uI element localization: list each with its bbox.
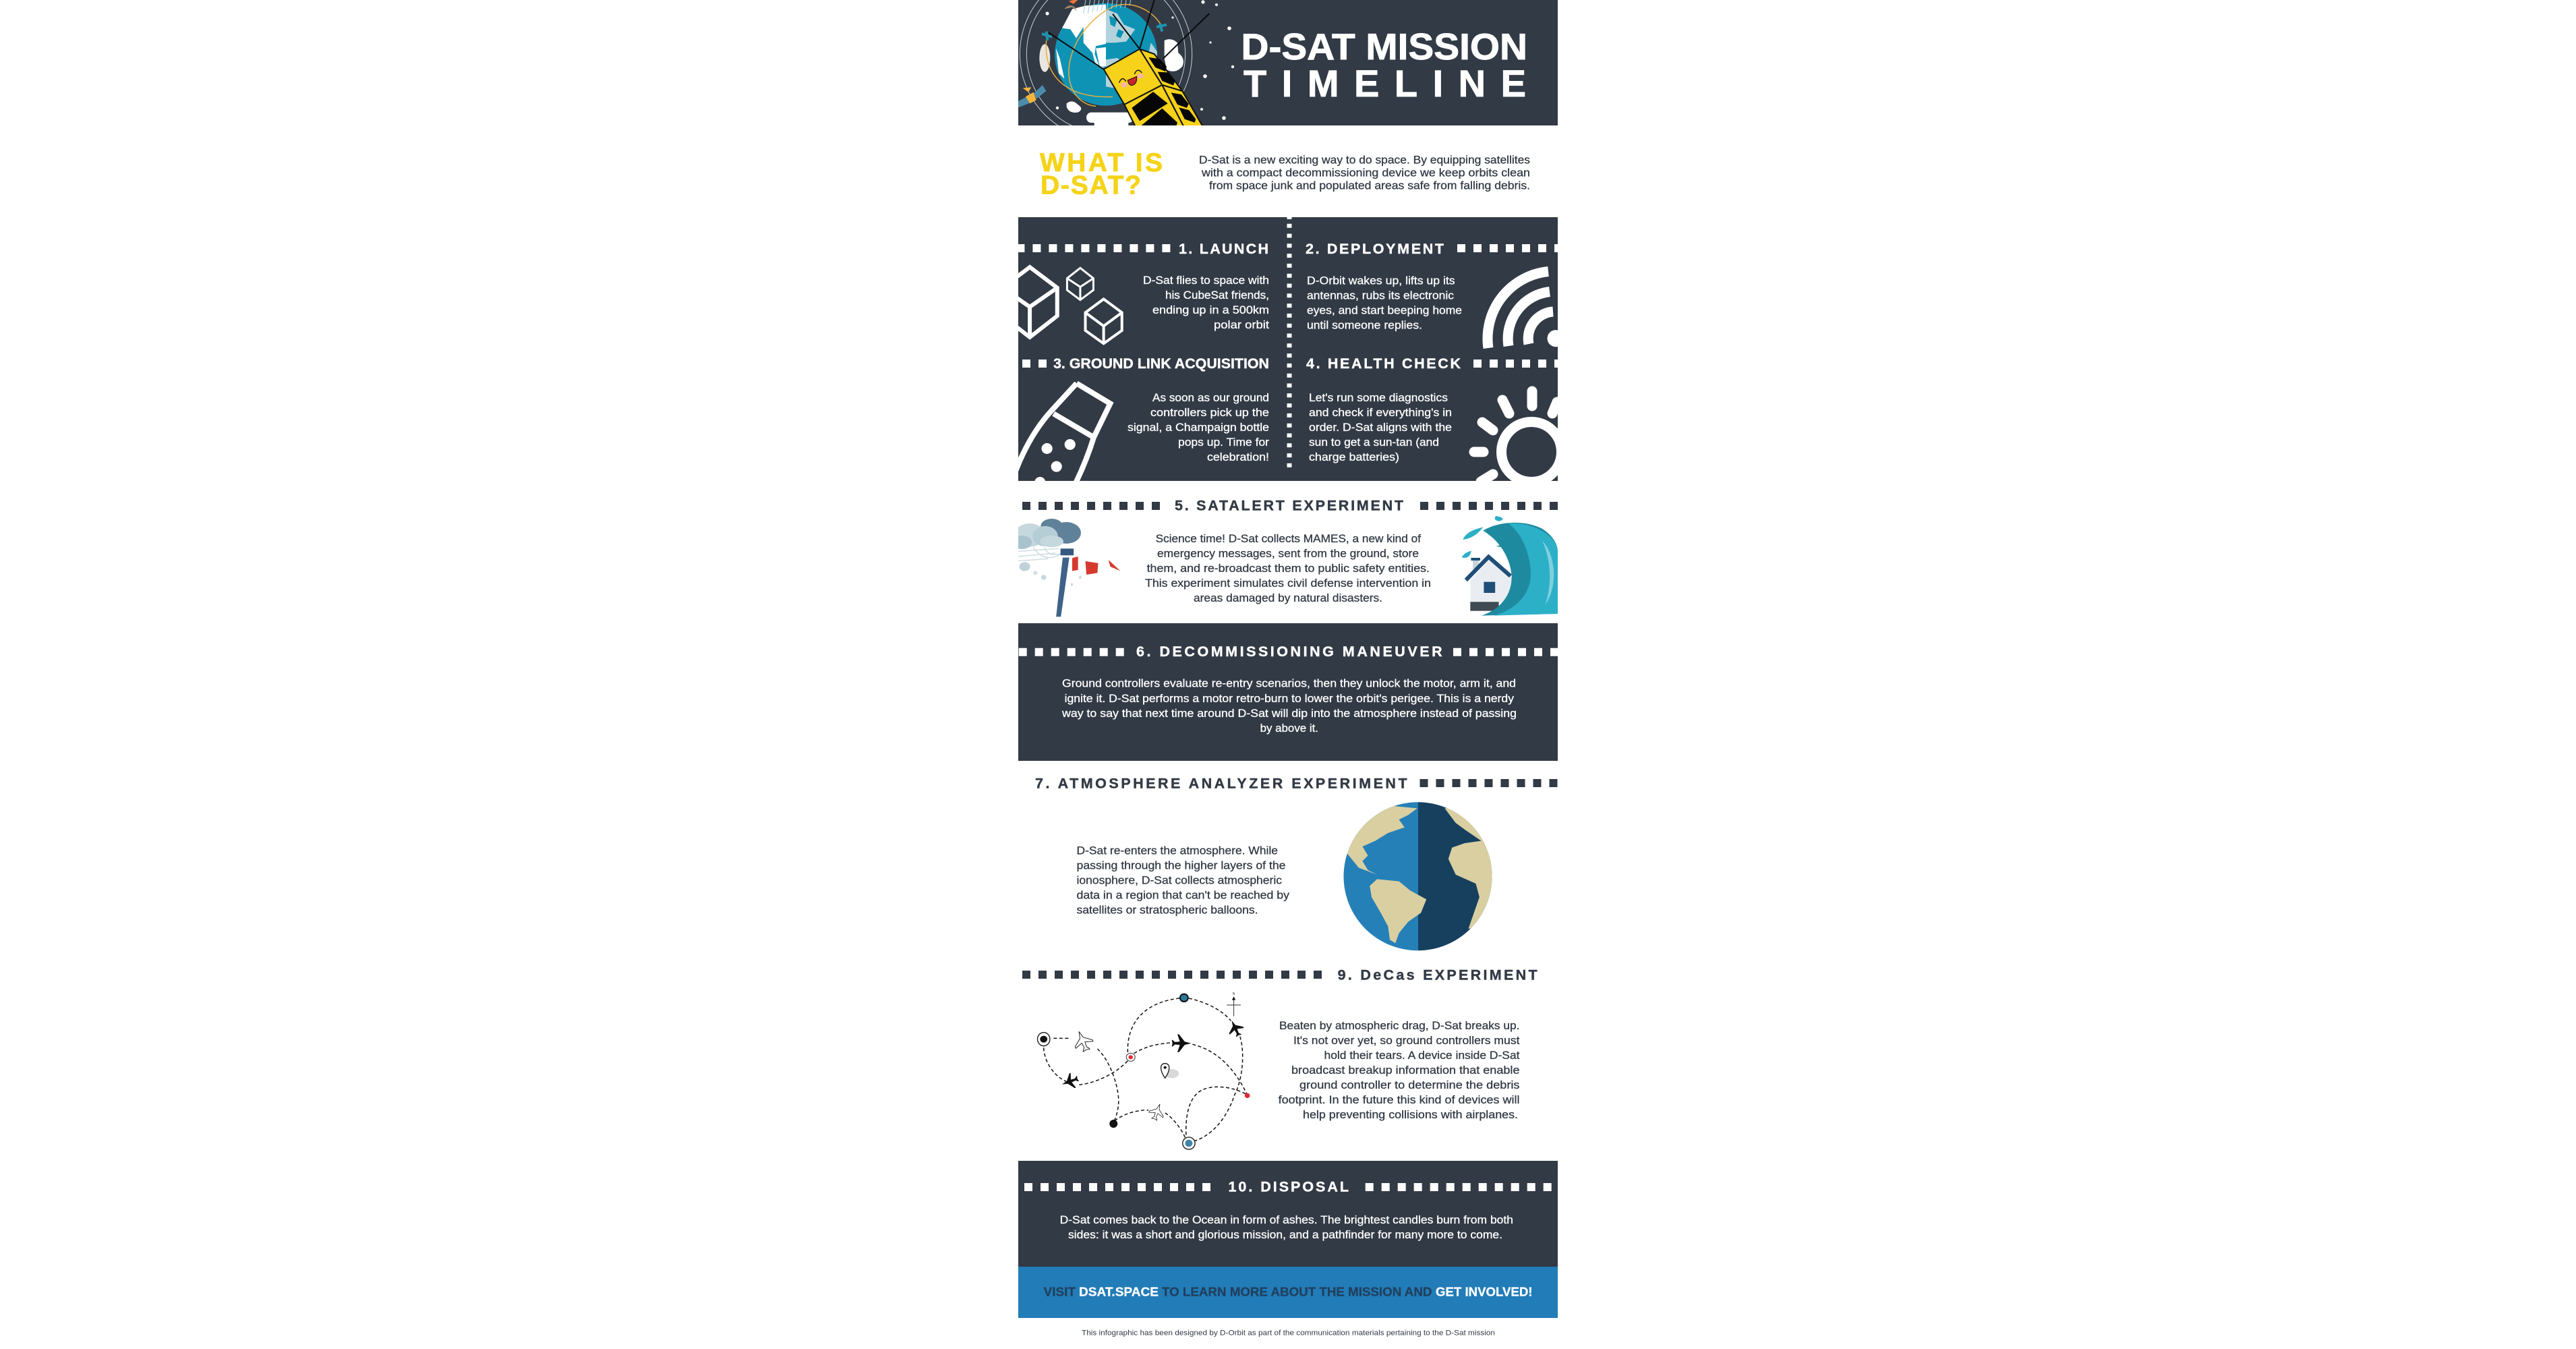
panel: call to action: [1018, 1267, 1558, 1318]
text 10: [1060, 1214, 1513, 1241]
heading 4: 4. HEALTH CHECK: [1306, 355, 1461, 372]
heading 5: 5. SATALERT EXPERIMENT: [1175, 498, 1403, 514]
text 1: his CubeSat friends,: [1165, 289, 1269, 302]
stars: [1045, 0, 1234, 120]
text 7: D-Sat re-enters the atmosphere. While: [1076, 845, 1278, 857]
text: call to action: DSAT.SPACE: [1079, 1285, 1159, 1299]
text 6: ignite it. D-Sat performs a motor retro-burn to lower the orbit's perigee. This is a nerdy: [1065, 693, 1515, 705]
text 5: This experiment simulates civil defense intervention in: [1145, 577, 1431, 590]
panel: atmosphere analyzer experiment: [1035, 775, 1558, 954]
text 1: ending up in a 500km: [1152, 304, 1269, 316]
heading 7: 7. ATMOSPHERE ANALYZER EXPERIMENT: [1035, 775, 1407, 791]
text 10: sides: it was a short and glorious mission, and a pathfinder for many more to come.: [1068, 1229, 1502, 1241]
heading 6: 6. DECOMMISSIONING MANEUVER: [1136, 643, 1442, 660]
text 10: D-Sat comes back to the Ocean in form of ashes. The brightest candles burn from both: [1060, 1214, 1513, 1226]
text 9: broadcast breakup information that enable: [1291, 1064, 1520, 1077]
text 9: hold their tears. A device inside D-Sat: [1324, 1050, 1520, 1062]
text 7: ionosphere, D-Sat collects atmospheric: [1076, 875, 1282, 887]
text 4: and check if everything's in: [1309, 407, 1452, 419]
text 5: Science time! D-Sat collects MAMES, a new kind of: [1156, 533, 1421, 545]
heading 10: 10. DISPOSAL: [1229, 1179, 1349, 1195]
text 9: ground controller to determine the debris: [1299, 1079, 1520, 1091]
text 6: Ground controllers evaluate re-entry scenarios, then they unlock the motor, arm it, and: [1062, 678, 1516, 690]
panel: satalert experiment: [1012, 498, 1558, 616]
text 5: emergency messages, sent from the ground, store: [1157, 548, 1419, 560]
text 6: way to say that next time around D-Sat will dip into the atmosphere instead of passing: [1061, 708, 1517, 720]
illustration: satellite over Earth: [1018, 0, 1234, 125]
icon: sun: [1474, 391, 1562, 482]
text 1: polar orbit: [1214, 319, 1269, 331]
text 4: Let's run some diagnostics: [1309, 392, 1448, 404]
chart: flight paths map: N: [1233, 992, 1235, 996]
footer credit: This infographic has been designed by D-Orbit as part of the communication materials pertaining to the D-Sat mission: [1082, 1329, 1495, 1337]
panel: decommissioning maneuver: [1018, 623, 1558, 761]
panel: disposal: [1018, 1161, 1558, 1267]
text 2: until someone replies.: [1307, 320, 1422, 332]
step 4: health check: [1306, 355, 1562, 482]
title: [1241, 26, 1527, 105]
chart: flight paths map: [1037, 992, 1250, 1149]
text 7: [1076, 845, 1290, 917]
text 6: [1061, 678, 1517, 735]
step 1: launch: [1002, 241, 1269, 343]
icon: black plane left: [1059, 1071, 1080, 1091]
text 7: satellites or stratospheric balloons.: [1076, 905, 1258, 917]
icon: black plane centre: [1172, 1035, 1191, 1052]
text 1: D-Sat flies to space with: [1143, 275, 1269, 287]
text 3: [1128, 392, 1270, 463]
icon: champagne bottle: [1015, 383, 1110, 488]
text 3: signal, a Champaign bottle: [1128, 422, 1269, 434]
heading: what is D-Sat: [1040, 148, 1163, 200]
text 3: pops up. Time for: [1178, 436, 1270, 449]
text 2: D-Orbit wakes up, lifts up its: [1307, 275, 1455, 287]
heading: what is D-Sat: D-SAT?: [1041, 171, 1141, 200]
heading 9: 9. DeCas EXPERIMENT: [1338, 967, 1538, 983]
step 2: deployment: [1306, 241, 1564, 348]
panel: header: [1018, 0, 1558, 125]
text 4: charge batteries): [1309, 451, 1399, 463]
icon: black plane top right: [1225, 1017, 1246, 1039]
icon: outline plane bottom: [1147, 1101, 1167, 1122]
text: description: [1199, 154, 1530, 192]
text: call to action: TO LEARN MORE ABOUT THE MISSION AND: [1162, 1285, 1432, 1299]
text 5: areas damaged by natural disasters.: [1194, 592, 1382, 604]
icon: outline plane: [1070, 1028, 1095, 1054]
text 4: [1309, 392, 1452, 463]
heading 2: 2. DEPLOYMENT: [1306, 241, 1444, 257]
title: TIMELINE: [1243, 62, 1526, 105]
text 1: [1143, 275, 1269, 331]
icon: signal waves: [1488, 271, 1564, 348]
text 6: by above it.: [1260, 722, 1318, 735]
panel: steps 1 to 4: [1002, 217, 1564, 488]
panel: what is D-Sat: [1040, 148, 1530, 200]
text 2: [1307, 275, 1462, 332]
panel: DeCas experiment: [1022, 967, 1538, 1149]
text: description: from space junk and populated areas safe from falling debris.: [1209, 179, 1530, 192]
text 2: eyes, and start beeping home: [1307, 305, 1462, 317]
title: D-SAT MISSION: [1241, 26, 1527, 67]
icon: tsunami wave and house: [1462, 516, 1558, 616]
text 9: Beaten by atmospheric drag, D-Sat breaks up.: [1279, 1020, 1520, 1032]
text 3: As soon as our ground: [1152, 392, 1269, 404]
icon: globe: [1343, 802, 1492, 951]
icon: cubes: [1002, 267, 1122, 343]
text 9: help preventing collisions with airplanes.: [1303, 1109, 1518, 1121]
step 3: ground link acquisition: [1015, 355, 1270, 488]
heading 3: 3. GROUND LINK ACQUISITION: [1053, 355, 1269, 372]
text: call to action: [1044, 1285, 1532, 1299]
text 9: It's not over yet, so ground controllers must: [1293, 1035, 1520, 1047]
text: call to action: VISIT: [1044, 1285, 1076, 1299]
icon: storm and windsock: [1012, 519, 1121, 616]
text: description: with a compact decommissioning device we keep orbits clean: [1201, 167, 1530, 179]
text 3: celebration!: [1207, 451, 1269, 463]
heading: what is D-Sat: WHAT IS: [1040, 148, 1163, 177]
text: description: D-Sat is a new exciting way to do space. By equipping satellites: [1199, 154, 1530, 166]
text 2: antennas, rubs its electronic: [1307, 290, 1454, 302]
text 4: sun to get a sun-tan (and: [1309, 436, 1439, 449]
text 9: [1279, 1020, 1520, 1121]
text 4: order. D-Sat aligns with the: [1309, 422, 1452, 434]
text 9: footprint. In the future this kind of devices will: [1279, 1094, 1520, 1106]
text: call to action: GET INVOLVED!: [1436, 1285, 1532, 1299]
text 5: [1145, 533, 1431, 604]
text 3: controllers pick up the: [1150, 407, 1269, 419]
text 7: passing through the higher layers of the: [1076, 860, 1285, 872]
heading 1: 1. LAUNCH: [1179, 241, 1268, 257]
text 7: data in a region that can't be reached by: [1076, 890, 1290, 902]
text 5: them, and re-broadcast them to public safety entities.: [1147, 563, 1430, 575]
